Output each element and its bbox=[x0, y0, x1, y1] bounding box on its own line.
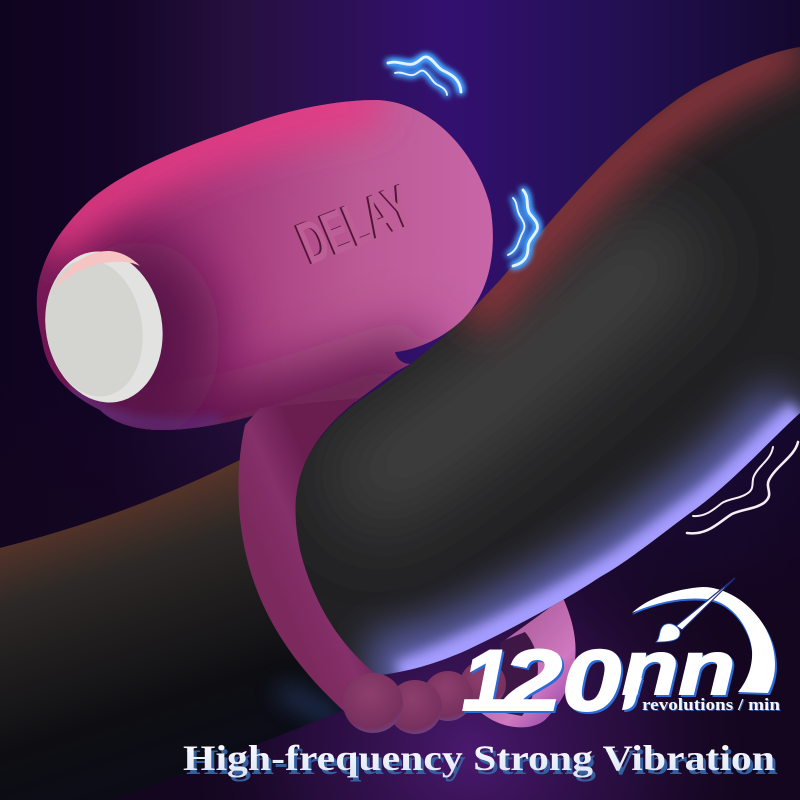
product beads bbox=[343, 661, 506, 734]
speed value: 1 bbox=[462, 633, 510, 729]
dark form, main diagonal section bbox=[280, 30, 800, 690]
product strap bbox=[238, 398, 378, 712]
speed unit: revolutions / min bbox=[643, 696, 782, 715]
icon: motion waves, right of capsule bbox=[508, 190, 538, 266]
speed unit: revolutions / min bbox=[642, 695, 781, 714]
icon: motion waves, top bbox=[388, 57, 461, 95]
engraved label: DELAY bbox=[286, 171, 421, 277]
speed value bbox=[462, 626, 737, 731]
gauge arc shadow bbox=[632, 589, 777, 695]
speed value: 20 bbox=[503, 635, 623, 731]
speed value: 20 bbox=[501, 633, 621, 729]
product loop behind bbox=[478, 598, 576, 727]
title: High-frequency Strong Vibration bbox=[186, 742, 778, 782]
icon: motion lines, lower right bbox=[687, 442, 798, 533]
speed value: nn bbox=[622, 626, 735, 711]
capsule body bbox=[36, 100, 493, 430]
gauge arc bbox=[632, 587, 775, 693]
speed value: 1 bbox=[464, 635, 512, 731]
gauge needle bbox=[676, 578, 735, 630]
title: High-frequency Strong Vibration bbox=[183, 738, 775, 778]
engraved label: DELAY bbox=[288, 171, 423, 277]
speed gauge bbox=[632, 578, 777, 695]
speed value: nn bbox=[624, 628, 737, 713]
dark form, left section bbox=[0, 440, 360, 800]
button bbox=[34, 242, 174, 412]
gauge hub bbox=[656, 624, 680, 642]
